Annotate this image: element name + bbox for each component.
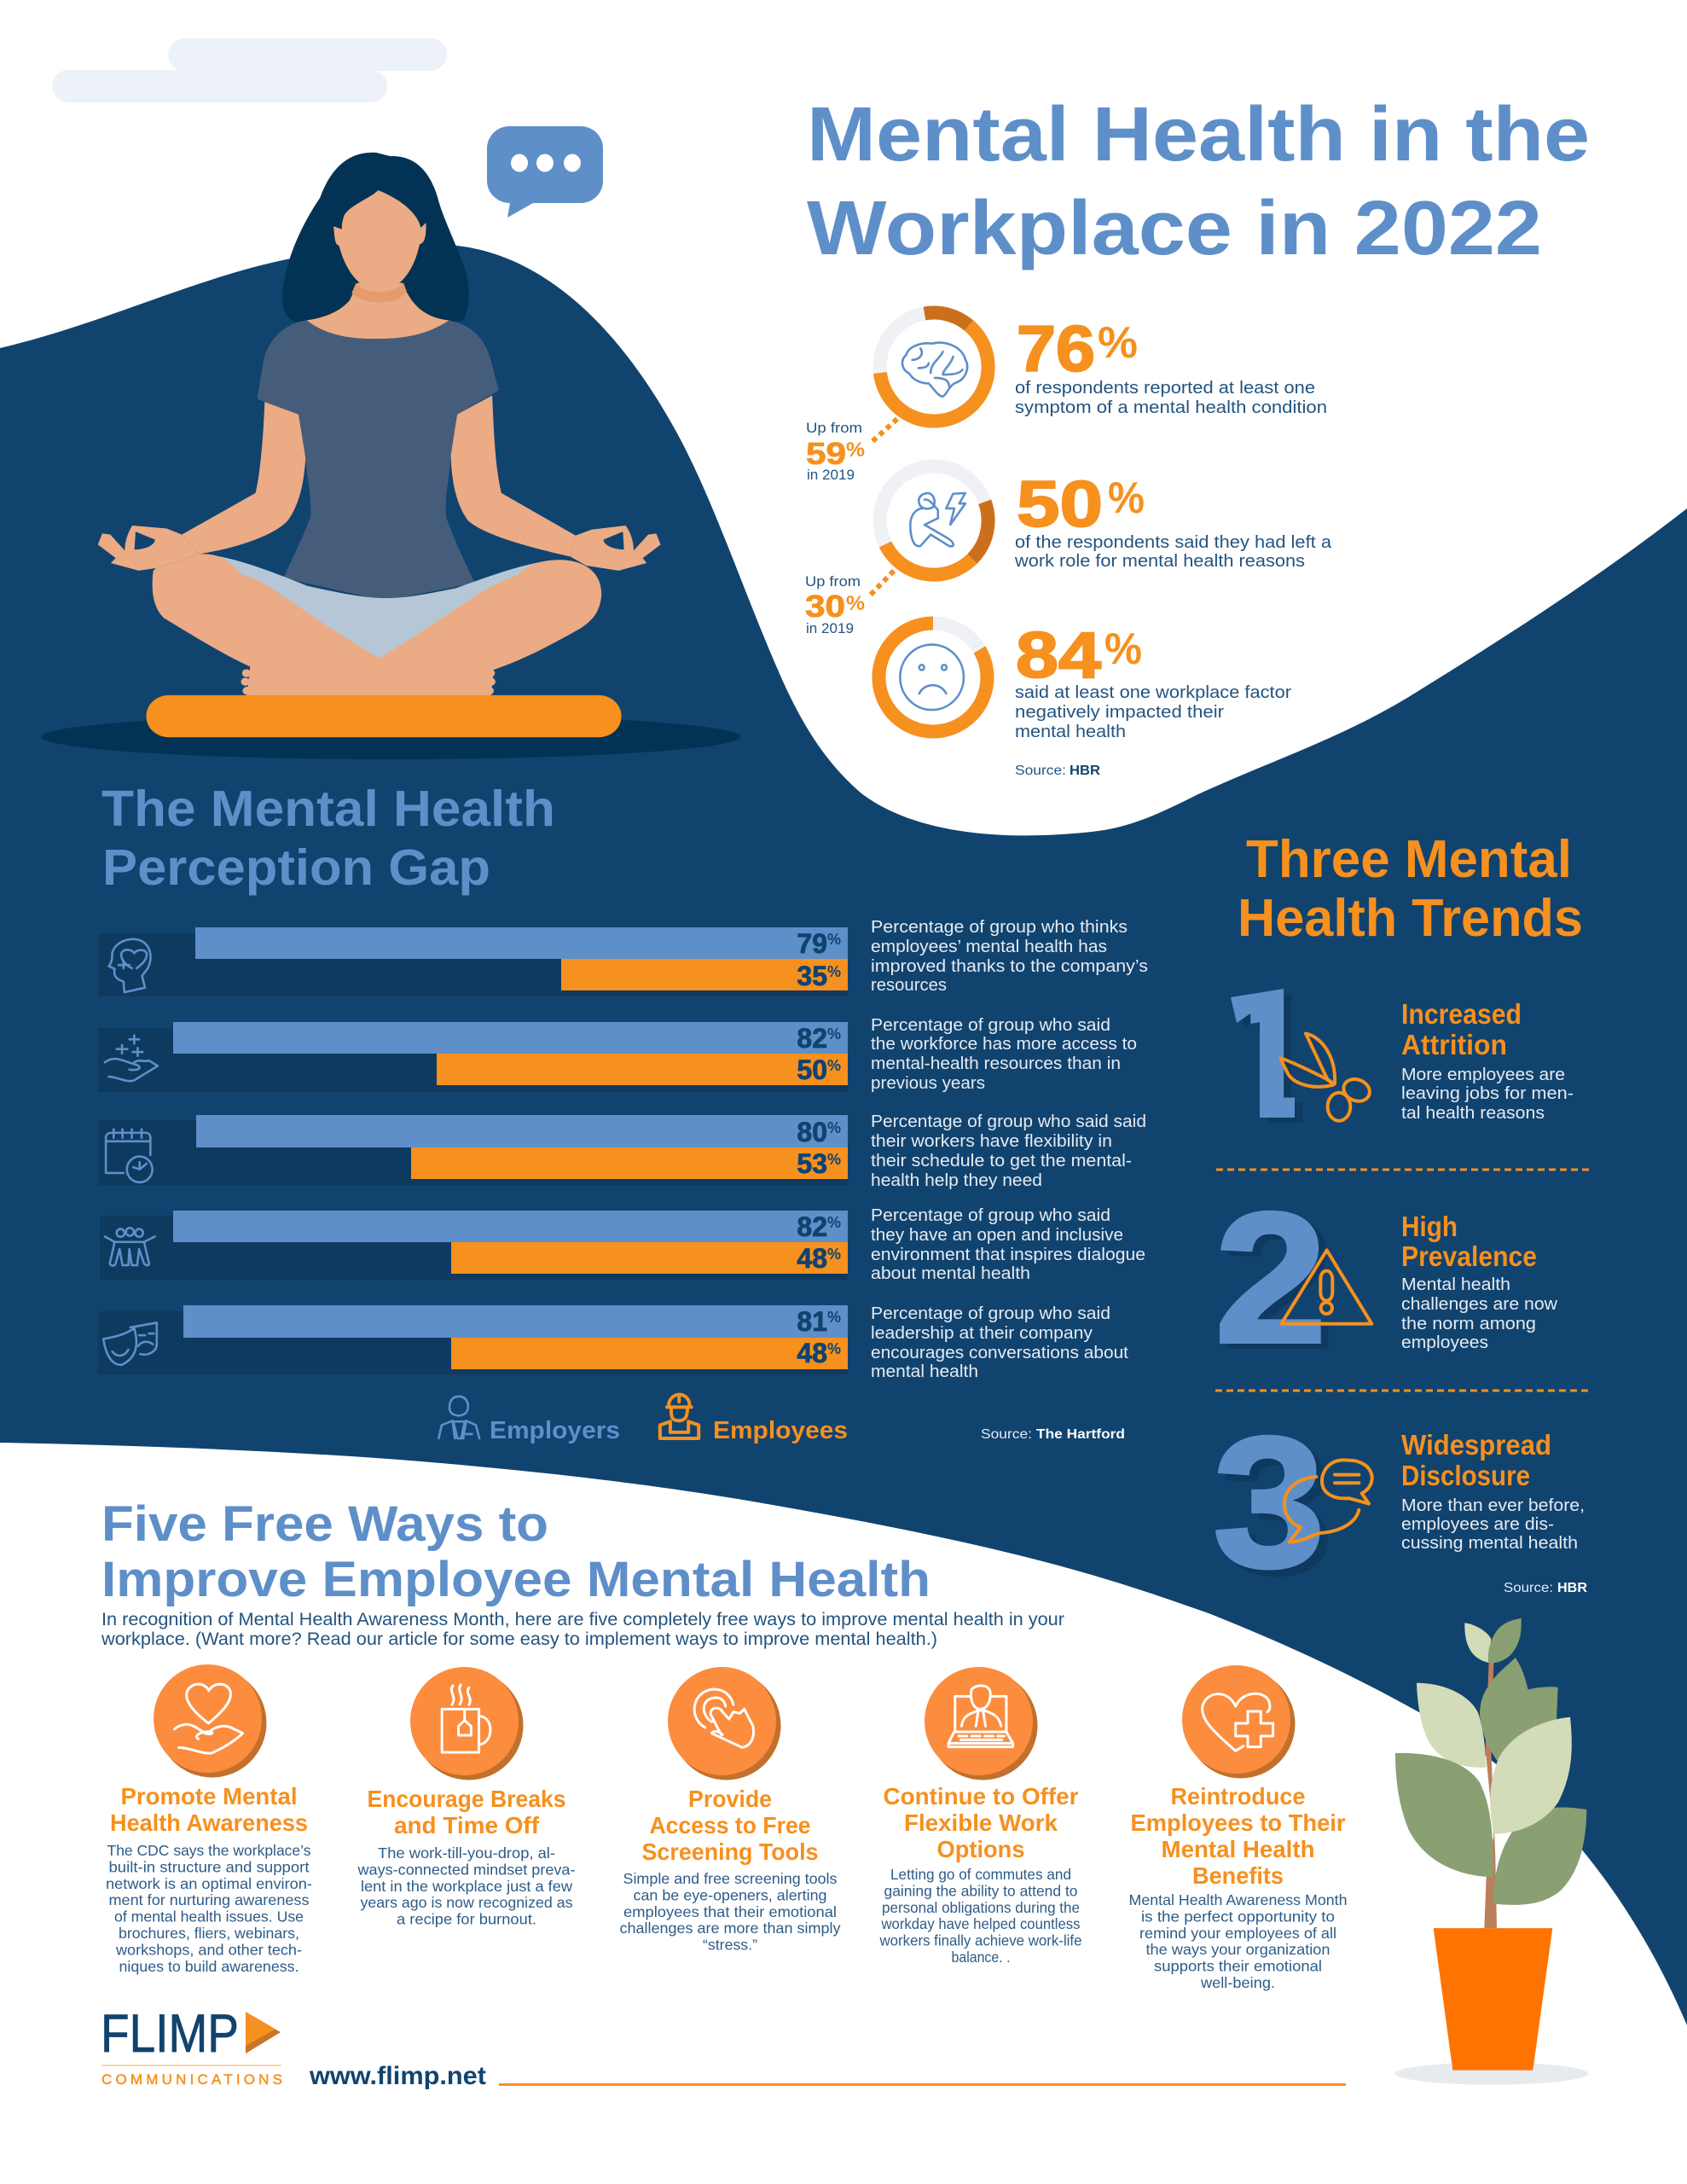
description 2: the workforce has more access to	[871, 1035, 1137, 1054]
icon: sad face	[900, 645, 964, 710]
trend 1: increased attrition	[1231, 989, 1573, 1123]
legend: employers and employees	[438, 1395, 848, 1444]
bar row 3: %	[827, 1151, 841, 1168]
title: Mental Health in the	[807, 92, 1590, 177]
icon: employee	[660, 1395, 699, 1438]
decorative clouds	[52, 38, 447, 102]
heading: perception gap: The Mental Health	[101, 781, 555, 837]
way 5 heading: Reintroduce	[1170, 1783, 1305, 1809]
way 5: reintroduce benefits	[1129, 1665, 1348, 1991]
trend 2 text: challenges are now	[1401, 1295, 1558, 1314]
stat 1 text	[1015, 313, 1327, 417]
heading: three mental health trends: Health Trends	[1238, 889, 1583, 948]
way 5 body: supports their emotional	[1154, 1958, 1322, 1975]
way 3 heading: Provide	[688, 1786, 772, 1812]
description 3: health help they need	[871, 1171, 1042, 1190]
source: the hartford: Source:	[981, 1427, 1032, 1442]
stat 3 text: mental health	[1015, 723, 1126, 741]
way 1 body: brochures, fliers, webinars,	[119, 1925, 299, 1942]
icon: theater masks	[103, 1322, 157, 1365]
way 4 body: personal obligations during the	[882, 1899, 1080, 1916]
way 2 body: a recipe for burnout.	[397, 1911, 536, 1928]
stat 1: 76 percent donut	[880, 312, 988, 421]
source: HBR: Source:	[1504, 1581, 1553, 1595]
description 1	[871, 918, 1148, 995]
intro paragraph: workplace. (Want more? Read our article for some easy to implement ways to improve mental health.)	[101, 1629, 937, 1649]
callout: up from 30 percent: 30	[805, 589, 845, 624]
way 1 heading: Promote Mental	[121, 1783, 297, 1809]
bar row 2: 50	[797, 1054, 827, 1085]
description 4: about mental health	[871, 1264, 1030, 1283]
icon: heart with cross	[1182, 1665, 1295, 1778]
trend 2: high prevalence	[1215, 1175, 1558, 1387]
icon: logo arrow	[246, 2012, 281, 2053]
trend 3 text: Widespread	[1401, 1429, 1551, 1461]
bar row 4: %	[827, 1246, 841, 1263]
trend 1 text: Increased	[1401, 998, 1522, 1030]
way 1 body	[106, 1842, 312, 1975]
description 4	[871, 1206, 1145, 1283]
numeral 3: 3	[1213, 1399, 1325, 1606]
stat 3 text: Source:	[1015, 764, 1066, 778]
description 1: improved thanks to the company’s	[871, 957, 1148, 976]
heading: five free ways	[101, 1496, 930, 1607]
logo: flimp communications: COMMUNICATIONS	[101, 2071, 282, 2088]
way 4 heading: Continue to Offer	[884, 1783, 1079, 1809]
icon: calendar with clock	[106, 1130, 153, 1182]
stat 2 text: of the respondents said they had left a	[1015, 533, 1332, 552]
trend 1 text: leaving jobs for men-	[1401, 1084, 1574, 1103]
way 4 heading: Options	[936, 1836, 1025, 1862]
illustration: potted plant	[1395, 1618, 1588, 2085]
callout: up from 59 percent: Up from	[806, 420, 862, 436]
stat 1 text: 76	[1017, 313, 1095, 386]
numeral 3: 3	[1220, 1406, 1333, 1613]
way 1 body: of mental health issues. Use	[114, 1908, 304, 1926]
trend 3 text: cussing mental health	[1401, 1534, 1578, 1553]
bar row 5: %	[827, 1309, 841, 1326]
stat 1 text: %	[1098, 318, 1138, 368]
trend 2 text: the norm among	[1401, 1315, 1536, 1333]
stat 3 text: %	[1104, 624, 1142, 674]
heading: five free ways: Five Free Ways to	[101, 1496, 548, 1552]
legend: employers and employees: Employers	[490, 1417, 620, 1444]
way 3 heading	[641, 1786, 819, 1865]
callout: up from 30 percent: Up from	[805, 573, 861, 590]
way 1 body: The CDC says the workplace’s	[107, 1842, 311, 1859]
bar row 5: 81	[797, 1306, 827, 1337]
bar row 2: %	[827, 1057, 841, 1074]
bar row 3: %	[827, 1119, 841, 1136]
callout: up from 59 percent	[806, 419, 897, 483]
way 1 body: niques to build awareness.	[119, 1958, 299, 1975]
trend 3: widespread disclosure	[1213, 1399, 1587, 1613]
stat 2 text: work role for mental health reasons	[1014, 552, 1305, 571]
logo: flimp communications	[101, 2004, 282, 2088]
illustration: meditating woman on cushion	[42, 153, 740, 759]
bar row 1	[98, 927, 848, 996]
heading: perception gap	[101, 781, 555, 896]
way 3 body: can be eye-openers, alerting	[633, 1886, 827, 1903]
way 4 body: workers finally achieve work-life	[879, 1932, 1081, 1949]
stat 3 text: said at least one workplace factor	[1015, 683, 1291, 702]
callout: up from 30 percent	[805, 571, 894, 636]
way 3 heading: Screening Tools	[641, 1838, 819, 1865]
way 2: breaks and time off	[357, 1667, 576, 1928]
bar row 3: 80	[797, 1117, 827, 1147]
trend 3 text: More than ever before,	[1401, 1496, 1585, 1515]
way 5 body: well-being.	[1200, 1974, 1275, 1991]
way 1 body: network is an optimal environ-	[106, 1875, 312, 1892]
way 4 body: workday have helped countless	[881, 1915, 1081, 1932]
way 1 heading: Health Awareness	[110, 1809, 308, 1836]
stat 3: 84 percent donut	[878, 623, 988, 732]
icon: brain	[902, 343, 967, 397]
stat 3 text: 84	[1016, 619, 1101, 692]
description 2: Percentage of group who said	[871, 1016, 1110, 1035]
description 5: Percentage of group who said	[871, 1304, 1110, 1323]
icon: group of people	[105, 1228, 155, 1266]
icon: chat bubbles	[1284, 1460, 1372, 1542]
way 5 body	[1129, 1891, 1348, 1991]
way 4 body: balance. .	[952, 1949, 1010, 1966]
way 3 body: Simple and free screening tools	[623, 1870, 838, 1887]
icon: scissors	[1281, 1033, 1371, 1121]
numeral 1: 1	[1219, 943, 1322, 1171]
way 4 body	[879, 1866, 1081, 1966]
way 1 body: workshops, and other tech-	[115, 1941, 302, 1958]
source: the hartford: The Hartford	[1036, 1427, 1125, 1442]
intro paragraph: In recognition of Mental Health Awareness Month, here are five completely free ways to improve mental health in your	[101, 1610, 1064, 1629]
way 4 heading: Flexible Work	[904, 1809, 1058, 1836]
numeral 2: 2	[1222, 1180, 1335, 1387]
trend 1 text: tal health reasons	[1401, 1104, 1545, 1123]
heading: five free ways: Improve Employee Mental Health	[101, 1552, 930, 1607]
description 4: environment that inspires dialogue	[871, 1246, 1145, 1264]
stat 3 text	[1015, 619, 1291, 778]
trend 1 text: Attrition	[1401, 1029, 1507, 1060]
way 3 body: employees that their emotional	[623, 1903, 837, 1920]
way 3 heading: Access to Free	[650, 1812, 810, 1838]
way 4: flexible work	[879, 1667, 1081, 1966]
way 2 body	[357, 1844, 576, 1928]
way 5 heading	[1131, 1783, 1346, 1889]
way 5 body: is the perfect opportunity to	[1141, 1908, 1335, 1925]
way 3: screening tools	[619, 1667, 841, 1954]
bar row 2: %	[827, 1025, 841, 1043]
stat 2: 50 percent donut	[880, 466, 988, 575]
bar row 4: 48	[797, 1243, 827, 1274]
callout: up from 59 percent: %	[846, 439, 865, 462]
callout: up from 30 percent: %	[846, 592, 865, 615]
stat 2 text: %	[1108, 473, 1145, 523]
way 1: promote awareness	[106, 1664, 312, 1975]
stat 3 text: negatively impacted their	[1015, 703, 1224, 722]
icon: speech bubble	[487, 126, 603, 218]
source: the hartford	[981, 1427, 1125, 1442]
callout: up from 59 percent: in 2019	[807, 467, 855, 483]
heading: three mental health trends: Three Mental	[1246, 830, 1572, 889]
description 3	[871, 1112, 1146, 1190]
bar descriptions	[871, 918, 1148, 1381]
bar row 4	[100, 1211, 848, 1280]
description 3: Percentage of group who said said	[871, 1112, 1146, 1131]
way 2 heading: and Time Off	[394, 1812, 540, 1838]
intro paragraph	[101, 1610, 1064, 1649]
trend 2 text	[1401, 1211, 1558, 1352]
way 2 body: The work-till-you-drop, al-	[378, 1844, 555, 1862]
callout: up from 30 percent: in 2019	[806, 620, 854, 636]
bar row 1: %	[827, 931, 841, 948]
trend 3 text: Disclosure	[1401, 1460, 1530, 1491]
bar row 5: 48	[797, 1338, 827, 1368]
way 5 body: Mental Health Awareness Month	[1129, 1891, 1348, 1908]
numeral 1	[1231, 989, 1302, 1123]
way 1 heading	[110, 1783, 308, 1836]
description 3: their schedule to get the mental-	[871, 1152, 1132, 1170]
bar row 2: 82	[797, 1023, 827, 1054]
description 2: mental-health resources than in	[871, 1054, 1121, 1073]
icon: laptop with person	[925, 1667, 1037, 1780]
title: Workplace in 2022	[807, 186, 1542, 271]
way 4 heading	[884, 1783, 1079, 1862]
description 5: leadership at their company	[871, 1324, 1093, 1343]
callout: up from 59 percent: 59	[806, 436, 846, 471]
way 1 body: ment for nurturing awareness	[109, 1891, 310, 1908]
description 5: mental health	[871, 1362, 978, 1381]
icon: tea mug	[410, 1667, 524, 1780]
description 1: Percentage of group who thinks	[871, 918, 1128, 937]
heading: three mental health trends	[1238, 830, 1583, 948]
bar row 1: %	[827, 963, 841, 980]
trend 1 text	[1401, 998, 1574, 1123]
way 5 heading: Benefits	[1192, 1862, 1284, 1889]
description 5: encourages conversations about	[871, 1344, 1128, 1362]
website url	[309, 2062, 1346, 2090]
description 2	[871, 1016, 1137, 1093]
legend: employers and employees: Employees	[713, 1417, 848, 1444]
way 2 body: ways-connected mindset preva-	[357, 1861, 576, 1878]
way 5 heading: Mental Health	[1162, 1836, 1315, 1862]
description 4: Percentage of group who said	[871, 1206, 1110, 1225]
bar row 3	[98, 1115, 848, 1185]
icon: employer	[438, 1397, 479, 1438]
bar row 5: %	[827, 1340, 841, 1357]
way 4 body: Letting go of commutes and	[890, 1866, 1071, 1883]
description 2: previous years	[871, 1074, 985, 1093]
way 1 body: built-in structure and support	[109, 1858, 310, 1875]
title	[807, 92, 1590, 271]
way 2 body: lent in the workplace just a few	[361, 1878, 572, 1895]
trend 2 text: Prevalence	[1401, 1240, 1537, 1272]
bar chart: perception gap	[98, 927, 848, 1374]
description 1: employees’ mental health has	[871, 938, 1107, 956]
description 3: their workers have flexibility in	[871, 1132, 1112, 1151]
stat 2 text	[1014, 468, 1332, 571]
way 3 body: challenges are more than simply	[619, 1920, 841, 1937]
description 5	[871, 1304, 1128, 1381]
stat 1 text: of respondents reported at least one	[1015, 379, 1315, 398]
bar row 4: %	[827, 1214, 841, 1231]
bar row 5	[98, 1305, 848, 1374]
trend 2 text: employees	[1401, 1333, 1488, 1352]
description 1: resources	[871, 976, 947, 995]
icon: hand with plus signs	[105, 1036, 158, 1081]
way 3 body: “stress.”	[703, 1937, 757, 1954]
trend 3 text: employees are dis-	[1401, 1515, 1554, 1534]
numeral 2: 2	[1215, 1175, 1327, 1382]
heading: perception gap: Perception Gap	[102, 839, 490, 896]
bar row 2	[98, 1022, 848, 1092]
bar row 1: 79	[797, 928, 827, 959]
way 2 body: years ago is now recognized as	[360, 1894, 573, 1911]
way 5 body: remind your employees of all	[1139, 1925, 1336, 1942]
icon: stressed person	[910, 493, 965, 546]
source: HBR	[1504, 1581, 1587, 1595]
logo: flimp communications: FLIMP	[101, 2004, 239, 2064]
website url: www.flimp.net	[309, 2062, 486, 2090]
bar row 4: 82	[797, 1211, 827, 1242]
trend 3 text	[1401, 1429, 1585, 1553]
way 5 heading: Employees to Their	[1131, 1809, 1346, 1836]
icon: head with heart	[109, 939, 150, 992]
icon: warning triangle	[1281, 1250, 1371, 1324]
numeral 1: 1	[1211, 938, 1314, 1166]
stat 2 text: 50	[1017, 468, 1103, 541]
bar row 1: 35	[797, 961, 827, 991]
trend 2 text: Mental health	[1401, 1275, 1510, 1294]
way 4 body: gaining the ability to attend to	[884, 1882, 1078, 1899]
way 5 body: the ways your organization	[1146, 1941, 1330, 1958]
source: HBR: HBR	[1557, 1581, 1587, 1595]
trend 1 text: More employees are	[1401, 1066, 1565, 1084]
way 2 heading: Encourage Breaks	[367, 1786, 566, 1812]
icon: heart in hand	[154, 1664, 266, 1778]
bar row 3: 53	[797, 1148, 827, 1179]
trend 2 text: High	[1401, 1211, 1458, 1242]
icon: tapping hand	[668, 1667, 781, 1780]
stat 1 text: symptom of a mental health condition	[1015, 398, 1327, 417]
way 3 body	[619, 1870, 841, 1954]
way 2 heading	[367, 1786, 566, 1838]
description 4: they have an open and inclusive	[871, 1226, 1123, 1245]
stat 3 text: HBR	[1070, 764, 1100, 778]
